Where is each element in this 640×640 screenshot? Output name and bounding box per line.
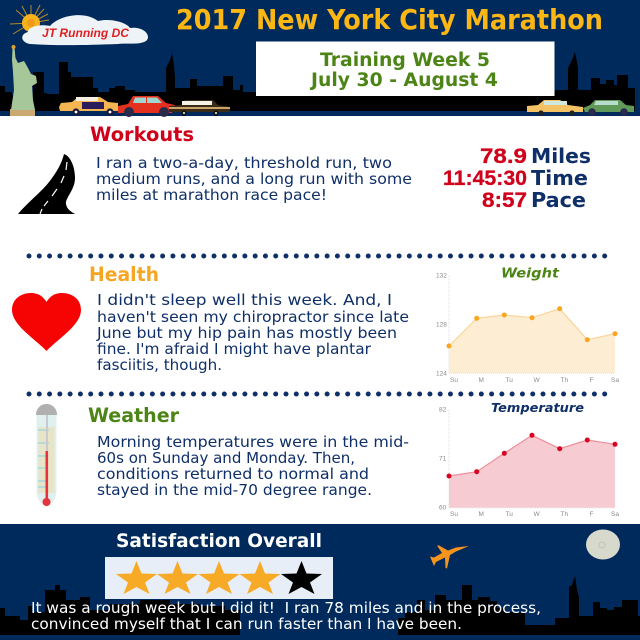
text block: health: June but my hip pain has mostly been bbox=[96, 324, 397, 342]
text block: summary: It was a rough week but I did it! I ran 78 miles and in the process, bbox=[31, 599, 541, 617]
chart title: temperature: Temperature bbox=[491, 400, 584, 415]
chart title: weight: Weight bbox=[501, 266, 560, 282]
weight axis labels bbox=[436, 272, 619, 384]
panel: workouts bbox=[18, 123, 591, 214]
logo: JT Running DC bbox=[10, 5, 148, 45]
temperature axis labels: 82 bbox=[439, 406, 447, 414]
weight axis labels: M bbox=[478, 377, 484, 384]
temperature axis labels: Th bbox=[560, 511, 568, 518]
text block: summary bbox=[31, 599, 541, 633]
temperature axis labels: 71 bbox=[439, 456, 447, 462]
stats: miles time pace: Miles bbox=[531, 144, 591, 168]
heading: weather: Weather bbox=[88, 404, 179, 427]
text block: health bbox=[96, 291, 409, 374]
temperature axis labels: 60 bbox=[439, 504, 447, 512]
weight area and line bbox=[446, 306, 618, 373]
icon: red car bbox=[118, 96, 175, 117]
subtitle line 2: July 30 - August 4 bbox=[309, 70, 498, 91]
heading: health: Health bbox=[89, 263, 159, 286]
weight axis labels: 128 bbox=[436, 322, 447, 328]
icon: road bbox=[18, 154, 75, 214]
temperature axis labels: Sa bbox=[611, 511, 619, 518]
weight axis labels: F bbox=[590, 377, 594, 384]
temperature area and line bbox=[446, 433, 618, 508]
text block: workouts: I ran a two-a-day, threshold run, two bbox=[96, 154, 392, 172]
icon: airplane bbox=[430, 546, 469, 568]
header skyline bbox=[0, 52, 635, 111]
text block: workouts bbox=[96, 154, 412, 204]
heading: satisfaction overall: Satisfaction Overall bbox=[116, 530, 322, 552]
icon: brown taxi bbox=[169, 100, 230, 116]
temperature axis labels: M bbox=[478, 511, 484, 518]
cloud bbox=[22, 15, 148, 45]
text block: weather bbox=[97, 433, 409, 499]
icon: heart bbox=[12, 293, 81, 351]
icon: thermometer bbox=[36, 404, 57, 507]
stats: miles time pace: 8:57 bbox=[482, 188, 527, 212]
stats: miles time pace bbox=[443, 144, 591, 212]
title: 2017 New York City Marathon bbox=[176, 4, 603, 36]
chart: weight bbox=[436, 266, 619, 384]
text block: health: haven't seen my chiropractor since late bbox=[97, 308, 409, 326]
icon: moon bbox=[586, 530, 620, 560]
stats: miles time pace: 11:45:30 bbox=[443, 166, 527, 190]
text block: workouts: miles at marathon race pace! bbox=[96, 186, 327, 204]
footer skyline bbox=[0, 576, 640, 635]
weight axis labels: 132 bbox=[436, 272, 447, 280]
panel: weather bbox=[36, 400, 619, 518]
temperature axis labels: Tu bbox=[506, 511, 513, 518]
stats: miles time pace: Time bbox=[531, 166, 588, 190]
icon: right taxi bbox=[527, 100, 583, 116]
stats: miles time pace: Pace bbox=[531, 188, 586, 212]
weight axis labels: W bbox=[534, 377, 540, 384]
temperature axis labels bbox=[439, 406, 619, 518]
weight axis labels: Th bbox=[560, 377, 568, 384]
icon: green car bbox=[583, 100, 634, 116]
text block: summary: convinced myself that I can run faster than I have been. bbox=[31, 615, 462, 633]
temperature axis labels: F bbox=[590, 511, 594, 518]
text block: health: fasciitis, though. bbox=[97, 356, 222, 374]
text block: health: fine. I'm afraid I might have plantar bbox=[97, 340, 372, 358]
icon: statue of liberty bbox=[10, 45, 37, 116]
text block: weather: Morning temperatures were in the mid- bbox=[97, 433, 409, 451]
weight axis labels: Su bbox=[450, 377, 458, 384]
panel: health bbox=[12, 263, 619, 384]
panel: footer satisfaction bbox=[0, 524, 640, 640]
text block: workouts: medium runs, and a long run with some bbox=[96, 170, 412, 188]
weight axis labels: 124 bbox=[436, 370, 447, 378]
stats: miles time pace: 78.9 bbox=[480, 144, 527, 168]
chart: temperature bbox=[439, 400, 619, 518]
subtitle line 1: Training Week 5 bbox=[320, 50, 490, 71]
weight axis labels: Tu bbox=[506, 377, 513, 384]
heading: workouts: Workouts bbox=[90, 123, 194, 146]
star rating bbox=[116, 561, 322, 594]
panel: header banner bbox=[0, 0, 640, 117]
text block: weather: conditions returned to normal and bbox=[97, 465, 369, 483]
logo text: JT Running DC bbox=[42, 26, 129, 40]
temperature axis labels: W bbox=[534, 511, 540, 518]
icon: yellow taxi bbox=[59, 97, 118, 116]
weight axis labels: Sa bbox=[611, 377, 619, 384]
subtitle box bbox=[256, 42, 554, 96]
text block: health: I didn't sleep well this week. And, I bbox=[97, 291, 392, 309]
icon: sun bbox=[10, 5, 49, 34]
rating box bbox=[105, 557, 333, 599]
text block: weather: 60s on Sunday and Monday. Then, bbox=[97, 449, 355, 467]
text block: weather: stayed in the mid-70 degree range. bbox=[97, 481, 372, 499]
temperature axis labels: Su bbox=[450, 511, 458, 518]
